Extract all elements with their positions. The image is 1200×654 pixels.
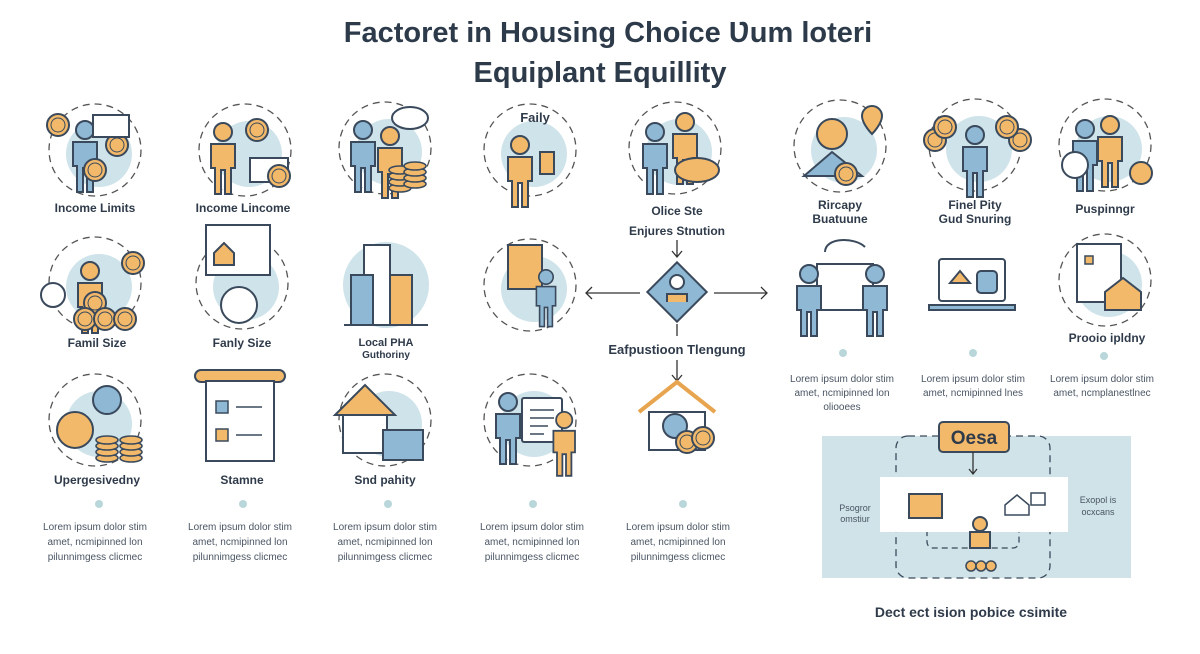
icon: Finel Pity xyxy=(924,99,1031,197)
icon: person with docs xyxy=(484,374,576,476)
title: Equiplant Equillity xyxy=(474,57,726,89)
label: Eafpustioon Tlengung: Eafpustioon Tlengung xyxy=(608,342,746,357)
text blocks bottom row: Lorem ipsum dolor stim xyxy=(43,522,147,533)
icon: Rircapy xyxy=(794,100,886,192)
label: Income Lincome: Income Lincome xyxy=(196,201,291,215)
text blocks bottom row: pilunnimgess clicmec xyxy=(485,552,579,563)
label: Prooio ipldny: Prooio ipldny xyxy=(1069,331,1146,345)
label: Olice Ste / Enjures Stnution: Enjures Stnution xyxy=(629,224,725,238)
title xyxy=(344,17,872,89)
panel: Oesa diagram xyxy=(822,422,1131,578)
text blocks right columns: Lorem ipsum dolor stim xyxy=(921,374,1025,385)
text blocks right columns: amet, ncmipinned lnes xyxy=(923,388,1023,399)
icon: calendar person xyxy=(484,239,576,331)
label: Stamne: Stamne xyxy=(220,473,264,487)
text blocks bottom row: Lorem ipsum dolor stim xyxy=(188,522,292,533)
dots and lorem text row 3 xyxy=(95,349,1108,508)
text blocks bottom row: amet, ncmipinned lon xyxy=(484,537,580,548)
text blocks bottom row: pilunnimgess clicmec xyxy=(338,552,432,563)
text blocks bottom row: pilunnimgess clicmec xyxy=(193,552,287,563)
label: Fanly Size: Fanly Size xyxy=(213,336,272,350)
icon: laptop xyxy=(929,259,1015,310)
label: Local PHA: Local PHA xyxy=(358,337,414,349)
icon: Fanly Size xyxy=(196,225,288,329)
caption: Dect ect ision pobice csimite xyxy=(875,604,1067,620)
text blocks bottom row: Lorem ipsum dolor stim xyxy=(626,522,730,533)
text blocks right columns: Lorem ipsum dolor stim xyxy=(1050,374,1154,385)
icon: clipboard house xyxy=(1059,234,1151,326)
text blocks right columns: amet, ncmipinned lon xyxy=(794,388,890,399)
icon: Famil Size xyxy=(41,237,144,333)
label: Upergesivedny: Upergesivedny xyxy=(54,473,140,487)
label: Income Limits: Income Limits xyxy=(55,201,136,215)
text blocks bottom row: pilunnimgess clicmec xyxy=(631,552,725,563)
icon: people with coins xyxy=(339,102,431,198)
label: Olice Ste / Enjures Stnution xyxy=(629,204,725,238)
panel: Oesa diagram: omstiur xyxy=(840,514,870,524)
icon: house with coins xyxy=(639,382,715,453)
text blocks bottom row xyxy=(43,522,730,563)
icon: Income Lincome xyxy=(199,104,291,196)
box: Oesa: Oesa xyxy=(951,428,998,449)
text blocks right columns: Lorem ipsum dolor stim xyxy=(790,374,894,385)
label: Finel Pity: Gud Snuring xyxy=(939,212,1011,226)
label: Snd pahity: Snd pahity xyxy=(354,473,416,487)
icon: Income Limits xyxy=(47,104,141,196)
icon: Olice Ste xyxy=(629,102,721,194)
text blocks bottom row: amet, ncmipinned lon xyxy=(192,537,288,548)
label: Rircapy Buatuune xyxy=(812,198,868,226)
icon: Local PHA building xyxy=(343,242,429,328)
text blocks bottom row: amet, ncmipinned lon xyxy=(337,537,433,548)
title: Factoret in Housing Choice Ʋum loteri xyxy=(344,17,872,49)
label: Finel Pity: Finel Pity xyxy=(948,198,1002,212)
icon: Faily xyxy=(484,104,576,207)
text blocks right columns: amet, ncmplanestlnec xyxy=(1053,388,1151,399)
text blocks bottom row: amet, ncmipinned lon xyxy=(630,537,726,548)
icon: people document xyxy=(797,240,887,336)
label: Rircapy Buatuune: Buatuune xyxy=(812,212,868,226)
text blocks right columns xyxy=(790,374,1154,413)
text blocks bottom row: pilunnimgess clicmec xyxy=(48,552,142,563)
text blocks right columns: oliooees xyxy=(823,402,861,413)
label: Local PHA xyxy=(358,337,414,361)
label: Local PHA: Guthoriny xyxy=(362,350,410,361)
panel: Oesa diagram: Psogror xyxy=(839,503,871,513)
label: Olice Ste / Enjures Stnution: Olice Ste xyxy=(651,204,703,218)
panel: Oesa diagram: ocxcans xyxy=(1081,507,1115,517)
panel: Oesa diagram: Exopol is xyxy=(1080,495,1117,505)
box: Oesa xyxy=(939,422,1009,452)
label: Finel Pity xyxy=(939,198,1011,226)
label: Famil Size: Famil Size xyxy=(68,336,127,350)
label: Puspinngr: Puspinngr xyxy=(1075,202,1135,216)
icon: house with boxes xyxy=(335,374,431,466)
diamond flow xyxy=(586,240,767,336)
text blocks bottom row: Lorem ipsum dolor stim xyxy=(333,522,437,533)
icon: Puspinngr xyxy=(1059,99,1152,191)
label: Rircapy Buatuune: Rircapy xyxy=(818,198,862,212)
arrow down xyxy=(672,360,682,381)
icon: Faily: Faily xyxy=(520,110,551,125)
text blocks bottom row: Lorem ipsum dolor stim xyxy=(480,522,584,533)
text blocks bottom row: amet, ncmipinned lon xyxy=(47,537,143,548)
icon: Upergesivedny xyxy=(49,374,142,466)
icon: checklist scroll xyxy=(195,370,285,461)
